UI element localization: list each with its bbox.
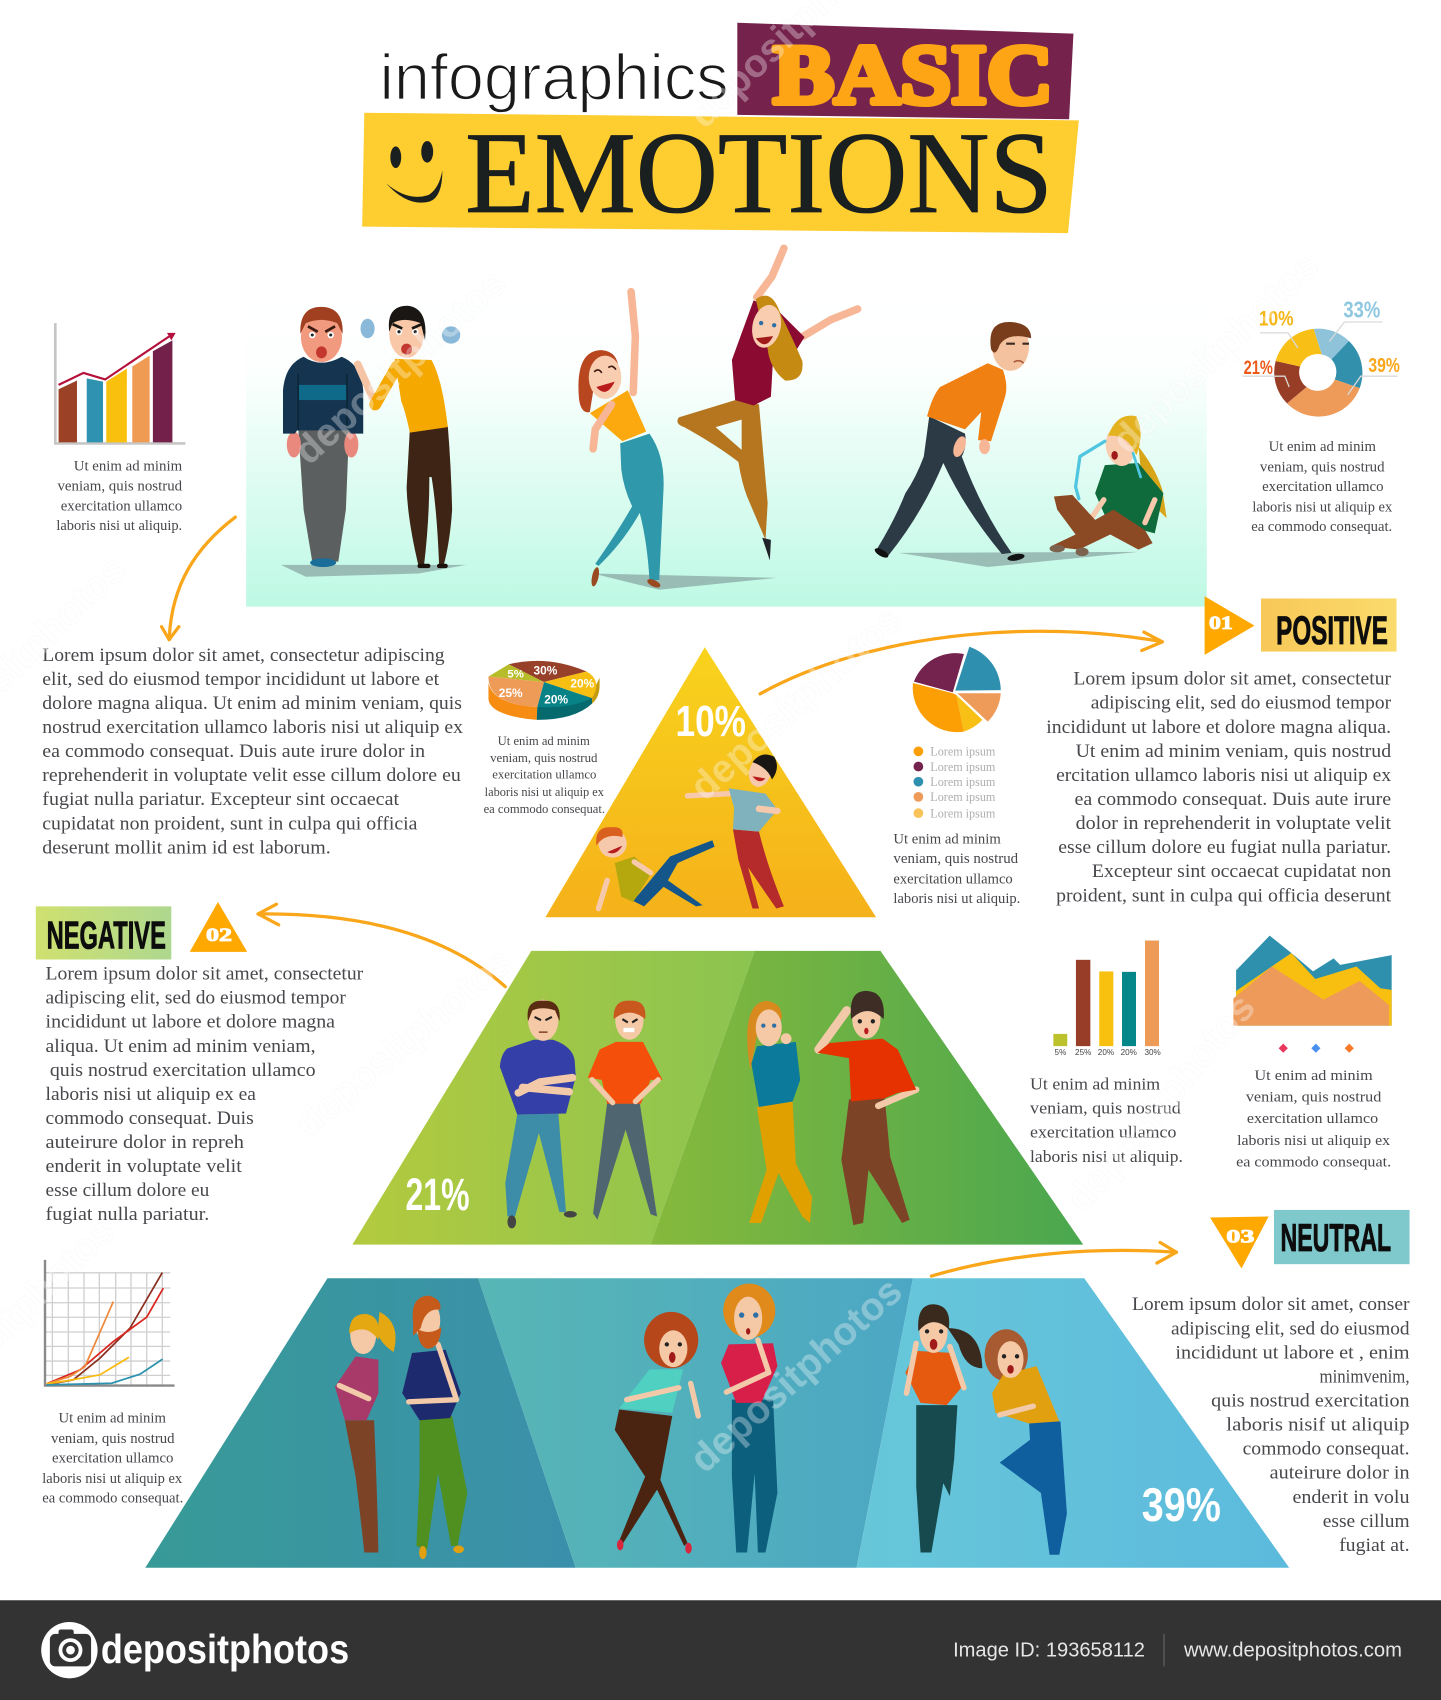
arrow: to positive	[760, 631, 1162, 694]
text: area caption: exercitation ullamco	[1247, 1111, 1378, 1127]
text: bars caption	[56, 459, 183, 534]
chart: 3d pie: 30%	[533, 663, 558, 677]
text: area caption: laboris nisi ut aliquip ex	[1237, 1133, 1391, 1149]
text: positive body: proident, sunt in culpa qui officia deserunt	[1056, 885, 1392, 905]
text: positive body: incididunt ut labore et dolore magna aliqua.	[1046, 717, 1391, 737]
text: neutral body: fugiat at.	[1339, 1535, 1410, 1555]
footer brand name: depositphotos	[101, 1626, 349, 1672]
watermarks: depositphotos	[682, 1269, 911, 1481]
text: area caption	[1236, 1068, 1391, 1171]
text: positive body: Ut enim ad minim veniam, quis nostrud	[1076, 741, 1391, 761]
figure: tall worried woman	[721, 1284, 777, 1553]
text: neutral body: Lorem ipsum dolor sit amet, conser	[1132, 1294, 1410, 1314]
value: 39%: 39%	[1142, 1479, 1221, 1532]
text: negative body: enderit in voluptate velit	[46, 1156, 243, 1176]
label: negative: NEGATIVE	[47, 915, 166, 958]
chart: rising bars	[55, 323, 185, 443]
pyramid tier: bottom blue	[145, 1278, 1289, 1568]
text: left body: Lorem ipsum dolor sit amet, consectetur adipiscing	[42, 645, 445, 665]
label: positive: 01	[1209, 613, 1233, 633]
text: left body: deserunt mollit anim id est laborum.	[42, 837, 331, 857]
text: donut caption: Ut enim ad minim	[1269, 439, 1377, 455]
text: negative body: incididunt ut labore et dolore magna	[46, 1012, 335, 1032]
text: left body: ea commodo consequat. Duis aute irure dolor in	[42, 741, 425, 761]
text: pie caption: veniam, quis nostrud	[893, 851, 1019, 867]
text: positive body: ea commodo consequat. Duis aute irure	[1075, 789, 1391, 809]
chart: bars: 30%	[1144, 1048, 1161, 1057]
text: 3d pie caption: ea commodo consequat.	[484, 801, 605, 816]
text: neutral body: adipiscing elit, sed do eiusmod	[1171, 1318, 1410, 1338]
text: positive body: Excepteur sint occaecat cupidatat non	[1092, 861, 1391, 881]
text: neutral body: quis nostrud exercitation	[1211, 1391, 1410, 1411]
legend: pie: Lorem ipsum	[930, 745, 996, 759]
footer image id: Image ID: 193658112	[953, 1639, 1145, 1662]
text: line chart caption: laboris nisi ut aliquip ex	[42, 1471, 183, 1487]
text: neutral body	[1132, 1294, 1410, 1555]
text: neutral body: laboris nisif ut aliquip	[1226, 1415, 1410, 1435]
text: negative body: aliqua. Ut enim ad minim veniam,	[46, 1036, 316, 1056]
text: negative body	[46, 964, 363, 1224]
text: line chart caption: Ut enim ad minim	[59, 1410, 167, 1426]
figure: scared woman in orange	[905, 1304, 982, 1553]
watermarks: depositphotos	[1104, 244, 1327, 462]
panel: mint scene	[246, 248, 1207, 607]
text: negative body: esse cillum dolore eu	[46, 1180, 209, 1200]
chart: exploded pie	[913, 647, 1001, 732]
chart: donut: 39%	[1368, 354, 1400, 377]
text: negative body: Lorem ipsum dolor sit amet, consectetur	[46, 964, 363, 984]
legend: pie: Lorem ipsum	[930, 806, 996, 820]
chart: bars: 20%	[1121, 1048, 1137, 1057]
text: bars caption: laboris nisi ut aliquip.	[56, 518, 182, 534]
arrow: to negative	[258, 904, 505, 987]
text: left body: reprehenderit in voluptate velit esse cillum dolore eu	[42, 765, 461, 785]
text: donut caption: ea commodo consequat.	[1251, 519, 1392, 535]
text: area caption: veniam, quis nostrud	[1246, 1090, 1382, 1106]
text: neutral body: incididunt ut labore et , enim	[1175, 1342, 1410, 1362]
figure: ponytail woman	[335, 1312, 396, 1553]
figure: bearded man	[402, 1296, 467, 1559]
text: 3d pie caption: veniam, quis nostrud	[490, 750, 598, 765]
icon: smiley	[386, 141, 442, 203]
watermarks: depositphotos	[287, 940, 521, 1145]
chart: donut: 21%	[1244, 357, 1273, 379]
chart: 3d pie: 20%	[570, 676, 595, 690]
value: 21%: 21%	[406, 1169, 469, 1220]
text: 3d pie caption: Ut enim ad minim	[498, 733, 590, 748]
text: pie caption	[893, 831, 1020, 907]
text: bars caption: veniam, quis nostrud	[1030, 1098, 1181, 1117]
text: positive body: ercitation ullamco laboris nisi ut aliquip ex	[1056, 765, 1391, 785]
figure: laughing seated man	[596, 827, 715, 909]
chart: 3d pie: 5%	[507, 669, 524, 681]
figure: scared woman in yellow	[985, 1329, 1067, 1555]
text: left body: dolore magna aliqua. Ut enim ad minim veniam, quis	[42, 693, 462, 713]
text: bars caption: Ut enim ad minim	[74, 459, 183, 475]
figures: angry men	[281, 306, 466, 577]
figure: crouching woman	[615, 1312, 698, 1554]
text: negative body: adipiscing elit, sed do eiusmod tempor	[46, 988, 346, 1008]
text: positive body: esse cillum dolore eu fugiat nulla pariatur.	[1058, 837, 1391, 857]
chart: lines	[45, 1260, 175, 1386]
text: negative body: laboris nisi ut aliquip ex ea	[46, 1084, 256, 1104]
text: left body: nostrud exercitation ullamco laboris nisi ut aliquip ex	[42, 717, 463, 737]
figure: angry man in orange	[588, 1001, 662, 1220]
text: bars caption: laboris nisi ut aliquip.	[1030, 1147, 1183, 1166]
text: pie caption: Ut enim ad minim	[893, 831, 1001, 847]
text: left body: elit, sed do eiusmod tempor incididunt ut labore et	[42, 669, 440, 689]
footer url: www.depositphotos.com	[1183, 1639, 1402, 1662]
text: bars caption	[1030, 1075, 1183, 1166]
text: positive body	[1046, 669, 1392, 905]
figure: man holding head	[818, 991, 916, 1225]
text: negative body: fugiat nulla pariatur.	[46, 1204, 209, 1224]
text: area caption: Ut enim ad minim	[1255, 1068, 1373, 1084]
text: bars caption: Ut enim ad minim	[1030, 1075, 1160, 1094]
label: neutral: 03	[1226, 1226, 1255, 1246]
icon: depositphotos logo	[41, 1622, 98, 1678]
text: area caption: ea commodo consequat.	[1236, 1155, 1391, 1171]
chart: 3d pie	[488, 661, 600, 720]
text: neutral body: auteirure dolor in	[1270, 1463, 1410, 1483]
chart: donut: 33%	[1343, 297, 1380, 323]
text: donut caption: laboris nisi ut aliquip ex	[1252, 500, 1393, 516]
text: 3d pie caption	[484, 733, 605, 816]
text: line chart caption: exercitation ullamco	[52, 1451, 173, 1467]
watermarks: depositphotos	[286, 261, 515, 473]
pyramid tier: top yellow	[545, 647, 876, 917]
icon: steam puffs	[361, 319, 460, 344]
chart: bars: 25%	[1075, 1048, 1091, 1057]
watermarks: depositphotos	[1058, 987, 1264, 1220]
text: bars caption: veniam, quis nostrud	[57, 479, 183, 495]
chart: bars: 5%	[1055, 1048, 1066, 1057]
chart: 3d pie: 20%	[544, 693, 569, 707]
text: bars caption: exercitation ullamco	[1030, 1122, 1176, 1141]
figures: happy women	[578, 248, 858, 590]
title banner: basic: BASIC	[773, 29, 1053, 122]
text: positive body: Lorem ipsum dolor sit amet, consectetur	[1073, 669, 1391, 689]
legend: pie: Lorem ipsum	[930, 775, 996, 789]
pyramid tier: middle green	[352, 951, 1083, 1245]
arrow: to left text	[162, 517, 235, 640]
text: negative body: commodo consequat. Duis	[46, 1108, 254, 1128]
title word: infographics: infographics	[379, 41, 729, 114]
watermarks: depositphotos	[682, 597, 911, 809]
text: negative body: quis nostrud exercitation ullamco	[50, 1060, 316, 1080]
title banner: emotions: EMOTIONS	[465, 109, 1053, 238]
label: negative	[36, 902, 247, 960]
figure: worried woman	[747, 1001, 812, 1223]
text: left body	[42, 645, 463, 857]
text: donut caption: exercitation ullamco	[1262, 479, 1384, 495]
text: left body: fugiat nulla pariatur. Excepteur sint occaecat	[42, 789, 400, 809]
chart: bars	[1053, 941, 1161, 1057]
text: neutral body: esse cillum	[1323, 1511, 1410, 1531]
figure: arms crossed man	[500, 1000, 577, 1228]
legend: pie: Lorem ipsum	[930, 760, 996, 774]
text: line chart caption: ea commodo consequat.	[42, 1491, 183, 1507]
legend: pie	[914, 745, 996, 820]
footer bar	[0, 1600, 1441, 1700]
figure: pointing man	[687, 754, 784, 909]
legend: pie: Lorem ipsum	[930, 790, 996, 804]
text: positive body: dolor in reprehenderit in voluptate velit	[1076, 813, 1392, 833]
text: 3d pie caption: exercitation ullamco	[492, 766, 596, 781]
text: neutral body: minimvenim,	[1320, 1366, 1410, 1386]
label: neutral	[1210, 1210, 1410, 1268]
text: negative body: auteirure dolor in repreh	[46, 1132, 244, 1152]
text: donut caption: veniam, quis nostrud	[1260, 460, 1385, 476]
text: bars caption: exercitation ullamco	[61, 499, 182, 515]
text: 3d pie caption: laboris nisi ut aliquip ex	[485, 784, 604, 799]
arrow: to neutral	[931, 1242, 1176, 1276]
label: positive	[1205, 596, 1397, 655]
text: pie caption: laboris nisi ut aliquip.	[893, 891, 1020, 907]
text: left body: cupidatat non proident, sunt in culpa qui officia	[42, 813, 417, 833]
title	[362, 23, 1079, 238]
value: 10%: 10%	[676, 698, 746, 746]
chart: donut: 10%	[1259, 305, 1294, 330]
figures: sad man and crying girl	[873, 322, 1167, 567]
text: neutral body: commodo consequat.	[1243, 1439, 1410, 1459]
text: line chart caption	[42, 1410, 183, 1507]
text: positive body: adipiscing elit, sed do eiusmod tempor	[1091, 693, 1391, 713]
text: line chart caption: veniam, quis nostrud	[51, 1431, 175, 1447]
text: pie caption: exercitation ullamco	[893, 872, 1013, 888]
text: neutral body: enderit in volu	[1292, 1487, 1410, 1507]
chart: 3d pie: 25%	[499, 686, 523, 700]
chart: bars: 20%	[1098, 1048, 1114, 1057]
label: negative: 02	[206, 925, 232, 945]
chart: area	[1233, 936, 1392, 1053]
text: donut caption	[1251, 439, 1393, 535]
chart: donut	[1243, 297, 1400, 417]
